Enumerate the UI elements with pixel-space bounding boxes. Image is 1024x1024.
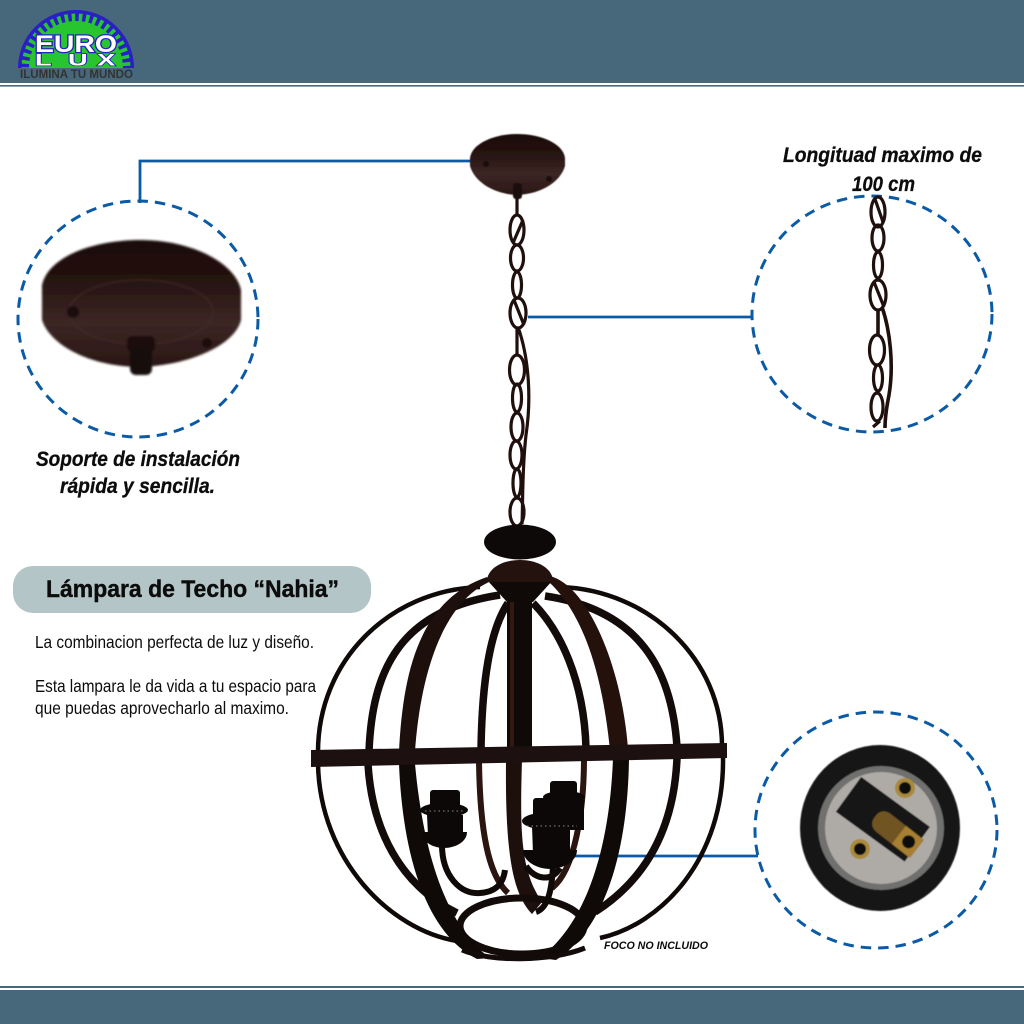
description text: La combinacion perfecta de luz y diseño. (35, 632, 314, 652)
footer bar (0, 986, 1024, 1024)
caption: mounting bracket (36, 448, 240, 498)
caption: mounting bracket: rápida y sencilla. (60, 475, 215, 498)
enlarged socket (800, 745, 960, 911)
enlarged ceiling rose (42, 240, 241, 375)
socket: back (543, 781, 585, 830)
socket: front right (522, 798, 580, 869)
socket arms (442, 845, 560, 912)
caption: chain length (783, 144, 982, 196)
description text (35, 632, 316, 718)
front bands (399, 577, 629, 960)
connector: socket to detail (575, 855, 758, 857)
logo: Eurolux: LUX (35, 50, 115, 69)
caption: chain length: 100 cm (852, 173, 915, 196)
logo: Eurolux: ILUMINA TU MUNDO (20, 69, 133, 81)
logo: Eurolux: EURO (35, 31, 117, 58)
socket: left (420, 790, 468, 848)
bottom ring (460, 898, 584, 954)
header bar (0, 0, 1024, 87)
caption: mounting bracket: Soporte de instalación (36, 448, 240, 471)
centre stem (506, 600, 542, 914)
caption: chain length: Longituad maximo de (783, 144, 982, 167)
title pill (13, 566, 371, 613)
top canopy (484, 524, 556, 602)
connector: chain to detail (528, 316, 753, 318)
chain (510, 197, 529, 526)
lamp (311, 134, 727, 960)
description text: Esta lampara le da vida a tu espacio para (35, 676, 316, 696)
globe frame (318, 587, 723, 941)
description text: que puedas aprovecharlo al maximo. (35, 698, 289, 718)
ceiling rose (470, 134, 565, 199)
detail circle: ceiling rose (18, 201, 258, 437)
logo: Eurolux (18, 10, 134, 78)
detail circle: socket (755, 712, 997, 948)
title pill: Lámpara de Techo “Nahia” (46, 576, 339, 603)
enlarged chain (870, 197, 891, 428)
detail circle: chain (752, 196, 992, 432)
connector: ceiling rose to detail (140, 161, 471, 203)
note: bulb not included: FOCO NO INCLUIDO (604, 940, 708, 952)
equator band (311, 743, 727, 767)
